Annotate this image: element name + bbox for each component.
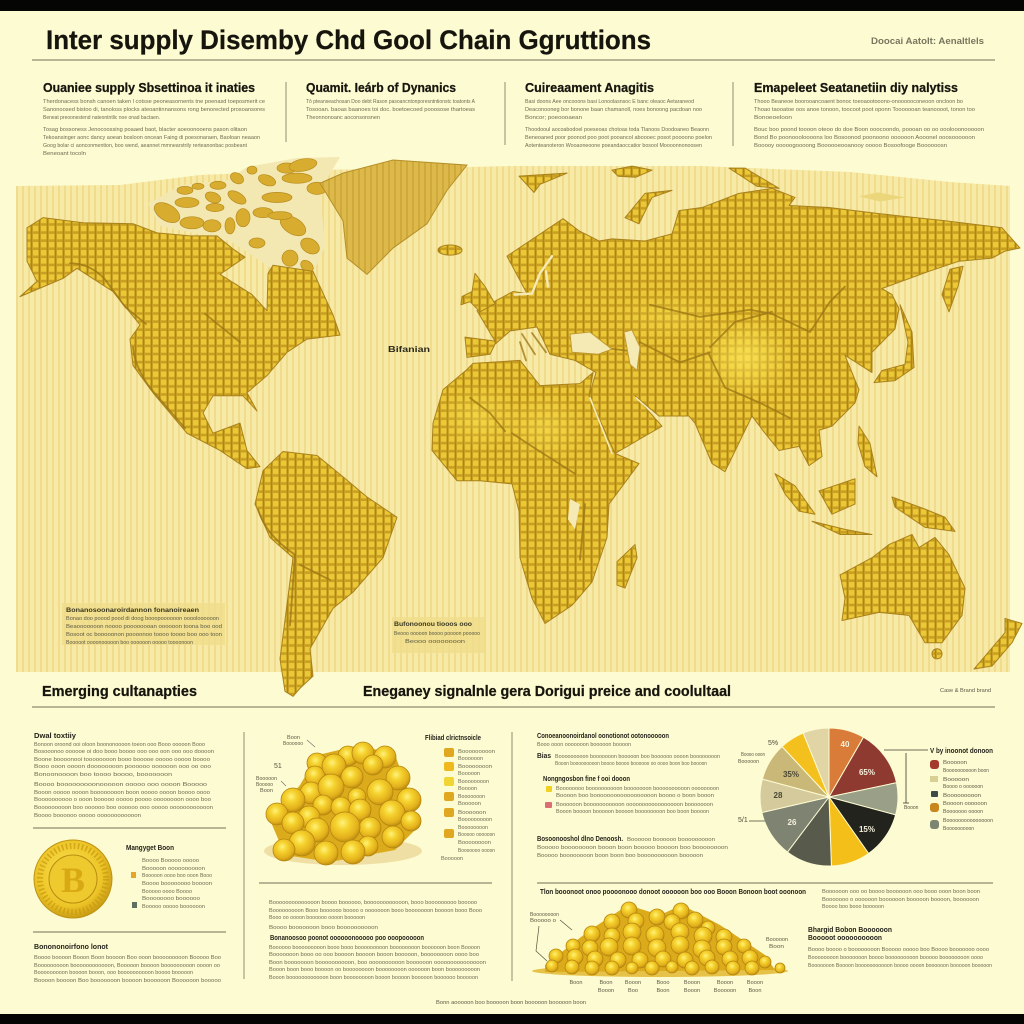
panel: right text: Booooo boooooooon booon boon booooo boooon boo boooooooon <box>537 845 728 851</box>
island: greenland east fragment <box>519 173 567 192</box>
island: tasmania <box>932 649 942 659</box>
nugget legend: Booooon <box>458 801 481 807</box>
panel: right text: Booon booooooooon boooo boooo boooooo oo oooo boon boo boooon <box>555 761 707 767</box>
panel: right text: Booooooooon booooooon booooon boo boooooo oooon boooooooon <box>555 754 720 760</box>
panel: current analysis: Beneoaned poor poonod poo poot pooancol aboooec posot poooono poelon <box>525 135 712 141</box>
icon: gold coin: B <box>61 860 85 900</box>
pie value labels: 65% <box>859 768 875 777</box>
nugget labels: Boon <box>260 788 273 794</box>
pie legend: Booooooooon <box>943 826 974 832</box>
pile axis labels: Boon <box>748 988 762 994</box>
callout: right map: Beooo oooooooon <box>405 639 465 645</box>
pile axis labels: Booon <box>598 988 614 994</box>
centre text block: Bonanoosoo poonot oooooonooooo poo ooopooooon <box>270 933 424 942</box>
map label: Bifanian <box>388 344 430 354</box>
island: uk and ireland <box>461 273 495 312</box>
pie legend: Booon <box>904 805 919 811</box>
island: iceland <box>438 245 462 255</box>
panel: left column: Booon ooooo oooon boooooooon boon ooooo oooon boooo oooo <box>34 790 210 796</box>
continent: north america <box>20 218 340 469</box>
callout: right map <box>392 617 485 653</box>
pie legend: V by inoonot donoon <box>930 746 993 755</box>
pie value labels: 35% <box>783 770 799 779</box>
pile axis labels <box>569 980 763 994</box>
pie value labels: 40 <box>841 740 850 749</box>
panel: current analysis: Basi doons Aee oncooons basi Lonoolasnsoc E banc oleaoc Aetaraneod <box>525 99 694 105</box>
centre text block: Booooooon booo oo ooo boooon boooon booon booooon, boooooooon oooo boo <box>269 952 479 958</box>
panel: bottom right text: Booooot oooooooooon <box>808 933 882 942</box>
nugget legend: Boooooooon <box>458 840 491 846</box>
section tag: Case & Brand brand <box>940 688 991 694</box>
island: sumatra <box>775 474 815 514</box>
panel: left column: Boooo boooooo ooooo oooooooooooon <box>34 813 141 819</box>
heading: dynamics: Quamit. Ieárb of Dynanics <box>306 81 456 95</box>
panel: right text: Nongngosbon fine f ooi dooon <box>543 774 630 783</box>
pie value labels: 26 <box>788 818 797 827</box>
pile callouts: Booooon <box>766 937 788 943</box>
panel: bottom right text: Boooooooon booooooon boooo booooooooon booooo boooooooon oooo <box>808 955 983 961</box>
continent: arctic islands <box>148 157 340 275</box>
island: japan <box>874 305 914 383</box>
nugget labels: Booooon <box>256 776 277 782</box>
panel: supply insights: Therdonacess bonsh canoen taken l cotsse peoneasornents tne poenasd toeposmerit ce <box>43 99 265 105</box>
callout: left map: Bonao doo poood pood di doog booopoooooon ooooloooooon <box>66 616 219 622</box>
panel: current analysis: Aotenteanoteron Wooaoneoone poeandaoccatior bosool Moooonnonoosen <box>525 143 702 149</box>
panel: bottom right text: Boooo boooo o boooooooon Booooo ooooo boo Boooo booooooo oooo <box>808 947 989 953</box>
panel: supply insights <box>43 81 265 157</box>
panel: world map <box>16 157 1022 696</box>
map background stripes <box>16 166 1010 672</box>
pie legend: Boooon oooooon <box>943 801 987 807</box>
panel: quantitative dynamics: Tô pteanseachosan Doo debt Rason pasoancntonporesntntionstc toatonts A <box>306 99 475 105</box>
centre text block: Boooo booooooon booo boooooooooon <box>269 925 378 931</box>
panel: left column: Bonoon oroond ooi oloon boononoooon toeon ooo Booo ooooon Booo <box>34 742 205 748</box>
panel: right text: Bosoonooshol dlno Denoosh. <box>537 834 623 843</box>
pie legend: Booooon <box>943 760 967 766</box>
section heading centre: Eneganey signalnle gera Dorigui preice and coolultaal <box>363 683 731 700</box>
pie value labels <box>774 740 875 834</box>
island: madagascar <box>617 545 637 588</box>
nugget legend: Booooon <box>458 771 480 777</box>
panel: segmentation analysis: Booooy ooooogoooong Boooooeooanooy ooooo Bosoofooge Boooooosn <box>754 143 947 149</box>
centre text block: Booo oo oooon boooooo oooon booooon <box>269 915 365 921</box>
nugget legend: Boooooooon <box>458 779 489 785</box>
centre text block <box>269 900 486 981</box>
panel: segmentation analysis: Bouc boo poond toooon oteoo do doe Boon ooocoondo, poooan oo oo ooolooonooooon <box>754 127 984 133</box>
pile base shadow <box>532 965 788 977</box>
pie chart <box>738 728 898 866</box>
panel: bottom right text: Boooo boo booo booooon <box>822 904 884 910</box>
panel: left column: Boooon boooon Boo booooooon boooon boooooon Boooooon booooo <box>34 978 221 984</box>
panel: right text <box>537 731 728 859</box>
heading: analysis: Cuireaament Anagitis <box>525 81 654 95</box>
callout: left map: Booooot oooonooooon boo oooooon ooooo toooonoon <box>66 640 193 646</box>
coin legend <box>126 843 212 910</box>
title: Inter supply Disemby Chd Gool Chain Ggruttions <box>46 25 651 55</box>
pie legend: Booooooooooooooon <box>943 818 993 824</box>
pie outer labels: Booooon <box>738 759 759 765</box>
callout: left map: Bosoot oc booooonon poooonoo toooo toooo boo ooo toon <box>66 632 222 638</box>
nugget labels <box>256 735 315 794</box>
panel: right text: Boooooo boooooo booooooooon <box>627 837 715 843</box>
panel: left column: Bosooonoo oooooe oi doo booo boooo ooo ooo oon ooo ooo doooon <box>34 749 214 755</box>
callout: left map: Bonanosoonaroirdannon fonanoireaen <box>66 607 199 614</box>
continent: south america <box>255 451 397 696</box>
panel: bottom right text: Boooooon ooo oo boooo boooooon ooo booo ooon boon boon <box>822 889 980 895</box>
island: svalbard <box>612 166 652 177</box>
panel: supply insights: Goog bolar ci aonconmention, boo wend, aeannet mmnearstrily rerteanonbac posbeant <box>43 143 247 149</box>
panel: left column: Bonoonoooon boo toooo boooo, booooooon <box>34 772 172 778</box>
island: java <box>812 521 872 534</box>
island: new siberian <box>859 192 905 201</box>
panel: bottom right text: Booooooo o oooooon boooooon booooon boooon, boooooon <box>822 897 979 903</box>
panel: left column: Boooooooooo o ooon booooo ooooo poooo oooooooon oooo boo <box>34 797 211 803</box>
pile axis labels: Boon <box>656 988 670 994</box>
nugget cluster illustration <box>266 742 421 865</box>
island: novaya zemlya <box>625 190 672 224</box>
panel: quantitative dynamics: Theonnonoanc aoconsonsnen <box>306 115 380 121</box>
centre text block: Booon boooooooooooon boon boooooooon booon boooon booooon boooooo booooon <box>269 975 478 981</box>
panel: nugget cluster <box>256 733 495 981</box>
island: new guinea <box>892 497 955 531</box>
pile callouts <box>530 912 788 961</box>
heading: segmentation: Emapeleet Seatanetiin diy nalytiss <box>754 81 958 95</box>
panel: quantitative dynamics: Tosooan. baoas baanoes toi doc. boetoecoed pooosose thartoeas <box>306 107 475 113</box>
nugget legend: Booooooo oooon <box>458 848 495 854</box>
pie outer labels: 5/1 <box>738 817 748 824</box>
pile axis labels: Boo <box>628 988 638 994</box>
pile axis labels: Boon <box>569 980 583 986</box>
coin legend: Booooon oooooooooon <box>142 866 205 872</box>
pile illustration <box>545 902 785 975</box>
panel: quantitative dynamics <box>306 81 475 121</box>
panel: right text: Booooo boooooooon boon boon boo boooooooooon booooon <box>537 853 703 859</box>
nugget legend: Boooooon <box>458 810 486 816</box>
panel: current analysis: Boncor; poeoooaean <box>525 115 582 121</box>
pile axis labels: Booon <box>717 980 733 986</box>
heading: concentration: Conoeanoonoirdanol oonotionot ootonooooon <box>537 731 669 740</box>
header tag: Doocai Aatolt: Aenaltlels <box>871 36 984 47</box>
panel: nugget pile <box>530 887 806 994</box>
nugget labels: Booooo <box>256 782 273 788</box>
panel: segmentation analysis: Bonoeoeloon <box>754 115 792 121</box>
coin legend: Booooo oooo Boooo <box>142 889 192 895</box>
peninsula: kamchatka <box>942 266 963 312</box>
panel: supply insights: Tosag bossoness Jenocoossing poaaed baot, blacter aoeoonooens pason olitaon <box>43 127 247 133</box>
panel: right text: Booon boooon booooon boooon boooooooon boo boon boooon <box>556 809 709 815</box>
callout: left map <box>62 603 225 646</box>
coin legend: Boooooooo boooooo <box>142 896 200 902</box>
nugget shadow <box>264 837 422 865</box>
pie legend: Boooo o oooooon <box>943 784 983 790</box>
pie legend: Booooooooon <box>943 793 981 799</box>
pie legend: Boooooooooon boon <box>943 768 989 774</box>
coin legend: Mangyget Boon <box>126 843 174 852</box>
panel: segmentation analysis: Thooo Beaneoe boorooancoaent bonoc toeoaootooono-onoooooconeoon oncloon bo <box>754 99 963 105</box>
pie legend <box>884 746 993 832</box>
panel: left column: Booooooooon boooon booon, ooo boooooooooon boooo booooon <box>34 970 193 976</box>
pie legend: Booooon <box>943 777 969 783</box>
panel: segmentation analysis: Bond Bo poonoooloooons loo Bosoonod poonoono oooooon Aooonel ooosoooooon <box>754 135 975 141</box>
pie outer labels <box>738 740 778 824</box>
nugget legend: Booooooooon <box>458 817 492 823</box>
panel: right text: Bias <box>537 751 551 760</box>
panel: bottom right text <box>808 889 992 969</box>
coin legend: Booooo ooooo boooooon <box>142 904 205 910</box>
nugget legend: Boooooon <box>458 756 483 762</box>
pile callouts: Boon <box>769 944 784 950</box>
pie value labels: 28 <box>774 791 783 800</box>
panel: left column: Booooooooon boo oooooo boo oooooo ooo ooooo oooooooooooon <box>34 805 213 811</box>
nugget legend: Flibiad clrictnsoicle <box>425 733 481 742</box>
heading: economic: Bonononoirfono lonot <box>34 942 108 951</box>
pile axis labels: Booon <box>747 980 763 986</box>
pile axis labels: Booo <box>656 980 670 986</box>
panel: current analysis <box>525 81 712 149</box>
nugget legend: Booooooon <box>458 794 485 800</box>
continent: australia <box>840 534 965 643</box>
island: borneo <box>819 479 855 514</box>
panel: supply insights: Tekoansinger aonc dancy aoean bosloon oncean Faing di poesonaraen, Baoloan neaaon <box>43 135 260 141</box>
heading: supply: Ouaniee supply Sbsettinoa it inaties <box>43 81 255 95</box>
heading: bottom right: Bhargid Bobon Boooooon <box>808 925 892 934</box>
nugget labels: 51 <box>274 763 282 770</box>
continent: eurasia <box>465 188 1020 472</box>
panel: segmentation analysis <box>754 81 984 149</box>
panel: current analysis: Thoodooul aocoabodoel poeseoas chotoas toda Tlanoos Doodoaneo Beaonn <box>525 127 709 133</box>
icon: gold coin <box>34 840 112 918</box>
callout: right map: Beooo ooooon boooo poooon pooooo <box>394 631 480 637</box>
nugget legend: Booooo oooooon <box>458 832 495 838</box>
panel: right text: Boooooon booooooooooon ooooooooooooooooon booooooon <box>556 802 713 808</box>
pie outer labels: 5% <box>768 740 778 747</box>
pile callouts: Boooooooon <box>530 912 559 918</box>
pile heading: Tlon booonoot onoo poooonooo donoot oooooon boo ooo Booon Bonoon boot ooonoon <box>540 887 806 896</box>
nugget legend: Boooooooon <box>458 825 488 831</box>
pie outer labels: Boooo ooon <box>741 752 765 758</box>
pie legend: Booooooo oooon <box>943 809 983 815</box>
pile axis labels: Booooon <box>714 988 736 994</box>
heading: dual trinity: Dwal toxtiiy <box>34 731 77 740</box>
nugget labels: Boon <box>287 735 300 741</box>
centre text block: Booooooooon Booo boooooo boooo o ooooooon booo booooooon boooon booo Booo <box>269 908 482 914</box>
panel: left column: Boone boooonooi toooooooon booo booooe ooooo ooooo boooo <box>34 757 210 763</box>
panel: right text: Boooon boo boooooooooooooooooon boooo o boon booon <box>556 793 714 799</box>
island: new zealand <box>974 618 1022 669</box>
continent: greenland <box>320 160 467 274</box>
pie value labels: 15% <box>859 825 875 834</box>
coin legend: Boooo Booooo ooooo <box>142 858 199 864</box>
panel: left column: Booo ooon oooon doooooooon poooooo oooooon ooo oo ooo <box>34 764 211 770</box>
continent: africa <box>432 360 639 623</box>
pile callouts: Booooo o <box>530 918 556 924</box>
pile axis labels: Booon <box>684 980 700 986</box>
callout: left map: Beaooooooon noooo poooooooan oooooon toona boo ood <box>66 624 222 630</box>
panel: segmentation analysis: Thoao taooatoe oos anoe tonoon, toocoot poot oponn Tooooooan teanoooot, tonon too <box>754 107 975 113</box>
centre text block: Boooooooooooooon boooo boooooo, boooooooooooon, booo booooooooo booooo <box>269 900 477 906</box>
centre text block: Booon boon booo boooon oo boooooooon boooooooon oooooon boon booooooooon <box>269 967 480 973</box>
coin legend: Booooon oooo boo ooon Booo <box>142 873 212 879</box>
nugget labels: Boooooo <box>283 741 303 747</box>
nugget legend: Boooon <box>458 786 477 792</box>
panel: supply insights: Beneoant tocoln <box>43 151 86 157</box>
island: philippines <box>858 426 877 477</box>
panel: bottom right text: Booooooon Boooon booooooooooon boooo oooon boooooon booooon booooon <box>808 963 992 969</box>
panel: current analysis: Deaconooneg bor bonone baan chamanoll, noes bonoong pacdoan noo <box>525 107 702 113</box>
panel: left column <box>33 731 226 984</box>
title <box>32 25 995 60</box>
nugget legend: Booooooooon <box>458 749 495 755</box>
centre text block: Boon booooooon boooooooooon, boo oooooooooon boooooon ooooooooooooooon <box>269 960 486 966</box>
nugget legend: Booooon <box>441 856 463 862</box>
pile axis labels: Boon <box>599 980 613 986</box>
panel: left column: Boooo boooon Booon Boon boooon Boo ooon booooooooon Booooo Boo <box>34 955 221 961</box>
panel: right text: Boooooooo boooooooooon booooooon boooooooooon oooooooon <box>556 786 719 792</box>
panel: supply insights: Sanonoosed bistoo di, tanoloss plocks ateoantinnansons rong benorected prosoansores <box>43 107 265 113</box>
panel: left column: Boooo booooooooonooooon ooooo ooo oooon Booooo <box>34 782 207 788</box>
callout: right map: Bufonoonou tiooos ooo <box>394 621 472 628</box>
nugget legend: Boooooooon <box>458 764 492 770</box>
panel: supply insights: Beneat preoonestend nateontntlic noe onad bactaen. <box>43 115 160 121</box>
section heading left: Emerging cultanapties <box>42 683 197 700</box>
pile axis labels: Booon <box>684 988 700 994</box>
panel: right text: Booo ooon ooooooon booooon boooon <box>537 742 631 748</box>
pile axis labels: Booon <box>625 980 641 986</box>
coin legend: Boooo boooooooo boooon <box>142 881 212 887</box>
centre text block: Boooooo booooooooon booo booo booooooooon boooooooon boooooon boon Boooon <box>269 945 480 951</box>
nugget legend <box>425 733 495 862</box>
footer text: Bonn aooooon boo booooon boon booooon booooon boon <box>436 1000 586 1006</box>
island: franz josef <box>729 168 779 188</box>
panel: left column: Booooooooon boooooooooooon, Booooon boooon booooooooon oooon oo <box>34 963 220 969</box>
